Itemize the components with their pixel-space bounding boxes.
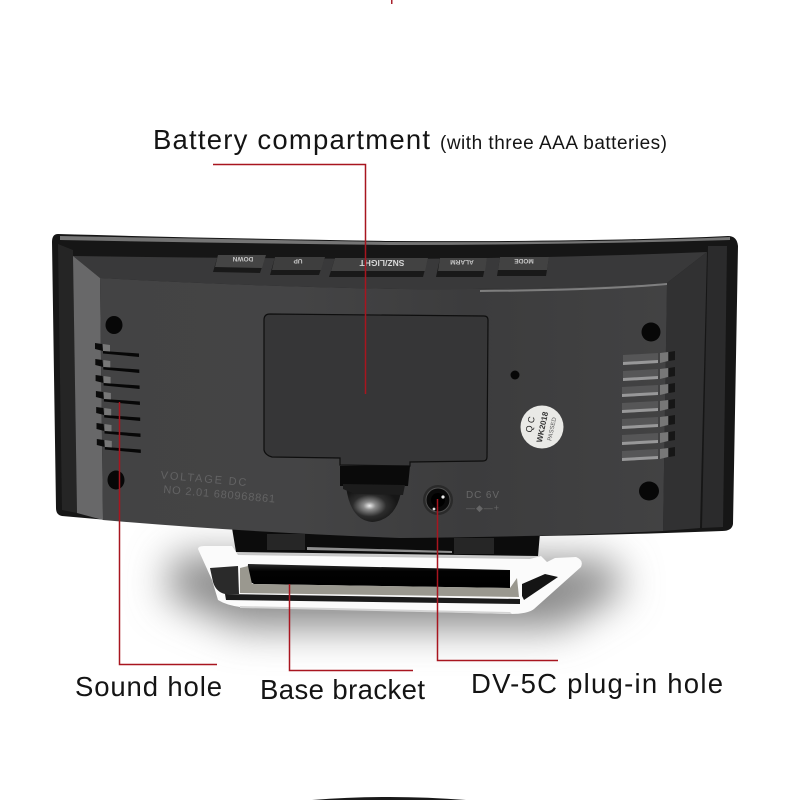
dark slot [247,564,510,588]
right shell strip [702,246,727,528]
embossed DC label [466,490,499,513]
embossed model text [159,470,277,506]
top inner wall [73,252,707,289]
latch and tilt hinge [340,466,410,522]
right dark side [522,574,558,600]
top tick mark [391,0,392,4]
embossed DC label: —◆—+ [466,503,499,513]
bottom edge dark arc [312,797,466,800]
product: alarm clock back view [52,234,738,628]
label: DV-5C plug-in hole: DV-5C plug-in hole [471,668,723,699]
label: sound hole: Sound hole [75,671,222,702]
heading: battery compartment: Battery compartment [153,124,430,155]
chrome front face dark band [225,594,520,604]
QC pass sticker: Q C [524,415,537,433]
left sound slots [95,343,141,453]
callout line: plug-in hole [438,499,558,660]
back panel surface [100,278,667,538]
callout line: battery compartment [213,164,366,394]
embossed model text: NO 2.01 680968861 [163,484,276,506]
clock outer shell [52,234,738,538]
battery compartment cover [264,314,488,466]
chrome body [198,546,582,614]
right inner wall [663,252,707,531]
right sound slots [622,351,675,461]
QC pass sticker [520,406,564,448]
base shadow [165,555,625,628]
left inner wall [73,256,103,520]
base bracket [198,528,582,614]
top buttons: MODE [514,257,534,264]
note: three AAA batteries: (with three AAA batteries) [440,133,667,154]
label: base bracket: Base bracket [260,674,425,705]
callout line: base bracket [290,584,413,670]
callout line: sound hole [120,402,217,664]
left shell strip [58,244,77,513]
QC pass sticker: PASSED [547,416,558,442]
rear hinge [232,528,540,556]
DC plug-in jack [423,485,453,515]
left dark side [210,566,239,594]
embossed model text: VOLTAGE DC [160,470,247,489]
embossed DC label: DC 6V [466,490,499,501]
top buttons [213,255,549,277]
QC pass sticker: WK2018 [535,410,550,443]
top buttons: ALARM [450,258,474,265]
top buttons: SNZ/LIGHT [359,258,404,268]
screw holes [106,316,660,500]
top buttons: UP [293,257,303,264]
top buttons: DOWN [232,255,253,262]
